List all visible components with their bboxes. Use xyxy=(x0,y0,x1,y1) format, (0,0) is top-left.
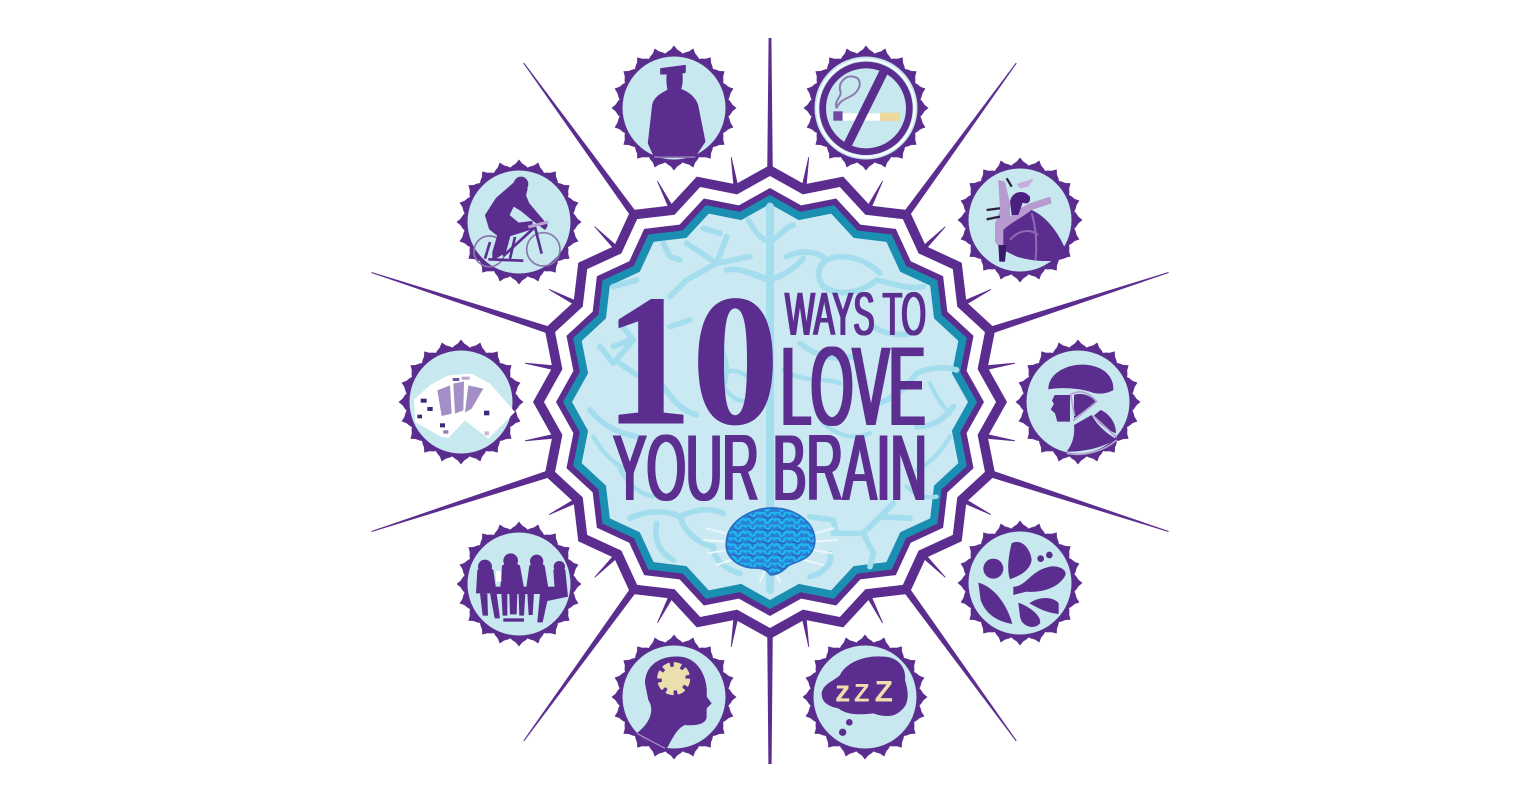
badge: heart health xyxy=(958,158,1082,282)
icon: sleep thought bubble: z xyxy=(835,674,850,708)
badge: no smoking xyxy=(804,46,928,170)
badge: helmet head protection xyxy=(1016,340,1140,464)
short radiating rays xyxy=(525,157,1015,647)
icon: head with cog xyxy=(637,656,712,749)
long radiating rays xyxy=(370,38,1170,764)
icon: small blue brain xyxy=(703,508,837,582)
badge: playing cards xyxy=(398,340,524,464)
infographic: 10 ways to love your brain: LOVE xyxy=(781,324,925,449)
badge: graduate xyxy=(612,46,736,170)
title line: ways to: WAYS TO xyxy=(785,280,926,348)
brain glow rays xyxy=(703,528,837,582)
icon: heart xyxy=(987,178,1068,262)
title line: your brain: YOUR BRAIN xyxy=(613,415,927,520)
title xyxy=(605,257,927,520)
badge: mental health xyxy=(612,634,736,760)
badge: healthy food xyxy=(958,520,1082,646)
icon: sleep thought bubble: Z xyxy=(854,679,869,707)
title number: 10: 10 xyxy=(605,257,779,464)
badge: sleep xyxy=(802,634,928,760)
cigarette xyxy=(833,111,900,121)
icon: sleep thought bubble: Z xyxy=(875,675,893,708)
icon: group at table xyxy=(476,553,568,622)
brain fold pattern xyxy=(590,207,957,590)
badge: cyclist xyxy=(456,160,582,284)
central starburst badge xyxy=(533,165,1007,639)
icon: sleep thought bubble xyxy=(822,656,908,736)
icon: healthy foods xyxy=(978,542,1066,627)
icon: cyclist xyxy=(474,177,560,267)
icon: playing cards xyxy=(414,374,515,439)
icon: head with helmet xyxy=(1048,365,1117,454)
icon: no smoking sign xyxy=(817,60,915,157)
icon: graduate silhouette xyxy=(648,65,705,158)
badge: social group xyxy=(456,522,582,646)
